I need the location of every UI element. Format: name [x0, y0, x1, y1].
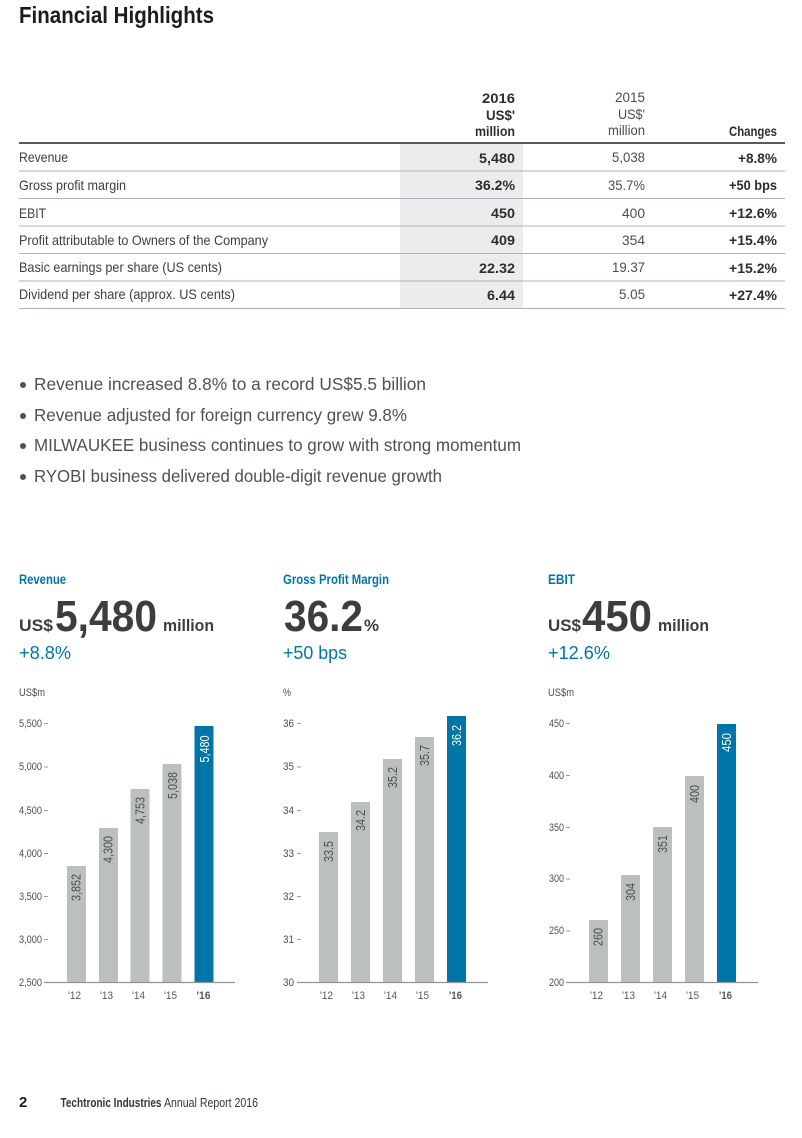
row: revenue: 5,038 [612, 149, 645, 165]
bar chart: gross profit margin [283, 716, 488, 1002]
bar chart: gross profit margin: 35.7 [418, 745, 432, 766]
change: gross profit margin: +50 bps [283, 642, 347, 663]
row: EBIT: 400 [622, 205, 645, 221]
row: gross profit margin [19, 177, 777, 193]
row: basic earnings per share: +15.2% [729, 260, 778, 276]
row: basic earnings per share [19, 259, 778, 276]
headline figure: EBIT [548, 592, 709, 641]
row: gross profit margin: +50 bps [729, 177, 777, 193]
bar chart: EBIT: 400 [549, 770, 564, 782]
bar chart: EBIT: 304 [624, 883, 638, 901]
report name: Techtronic Industries [60, 1096, 162, 1110]
row: gross profit margin: 36.2% [475, 177, 516, 193]
bar chart: gross profit margin: 30 [283, 977, 294, 989]
bar chart: revenue: 3,000 [19, 934, 42, 946]
bar chart: EBIT: '12 [590, 990, 603, 1002]
bar chart: revenue: 4,753 [134, 797, 148, 824]
bar chart: revenue: 2,500 [19, 977, 42, 989]
bar chart: EBIT: 450 [720, 733, 734, 752]
bar chart: EBIT: 400 [688, 785, 702, 803]
bar chart: EBIT: 300 [549, 873, 564, 885]
headline figure: EBIT: 450 [582, 592, 652, 641]
bullet list: MILWAUKEE business continues to grow with strong momentum [34, 435, 521, 455]
bar chart: revenue: '16 [196, 990, 210, 1002]
row: EBIT [19, 205, 778, 221]
panel: financial table [19, 89, 785, 308]
bar chart: revenue: 3,500 [19, 891, 42, 903]
headline figure: gross profit margin: 36.2 [284, 592, 363, 641]
heading: revenue: Revenue [19, 572, 66, 587]
bar chart: EBIT: 450 [549, 718, 564, 730]
page number: 2 [19, 1094, 27, 1111]
headline figure: revenue: 5,480 [55, 592, 157, 641]
title: Financial Highlights [19, 2, 214, 28]
headline figure: EBIT: million [658, 616, 709, 635]
row: basic earnings per share: Basic earnings per share (US cents) [19, 259, 222, 275]
bar chart: revenue: '14 [132, 990, 145, 1002]
bar chart: EBIT: '14 [654, 990, 667, 1002]
bullet list [20, 374, 521, 486]
bar chart: revenue: 5,480 [198, 735, 212, 762]
bar chart: revenue [19, 718, 235, 1002]
table header: US$' [618, 106, 645, 122]
table header: Changes [729, 123, 777, 139]
footer [19, 1094, 258, 1111]
panel: EBIT [548, 572, 758, 1002]
bar chart: gross profit margin: 35 [283, 761, 294, 773]
row: EBIT: +12.6% [729, 205, 778, 221]
row: revenue: Revenue [19, 149, 68, 165]
row: basic earnings per share: 19.37 [612, 259, 645, 275]
change: EBIT: +12.6% [548, 642, 610, 663]
bar chart: gross profit margin: 31 [283, 934, 294, 946]
table header [475, 89, 777, 139]
row: gross profit margin: Gross profit margin [19, 177, 126, 193]
row: profit attributable: 354 [622, 232, 645, 248]
row: EBIT: 450 [491, 205, 515, 221]
panel: revenue [19, 572, 235, 1002]
bar chart: revenue: '13 [100, 990, 113, 1002]
bar chart: gross profit margin: '15 [416, 990, 429, 1002]
row: dividend per share [19, 286, 778, 303]
row: basic earnings per share: 22.32 [479, 260, 515, 276]
bar chart: gross profit margin: 34.2 [354, 810, 368, 831]
headline figure: revenue [19, 592, 214, 641]
bar chart: EBIT: 351 [656, 835, 670, 853]
bar chart: gross profit margin: '12 [320, 990, 333, 1002]
table header: million [475, 123, 515, 139]
change: revenue: +8.8% [19, 642, 71, 663]
table header: 2016 [482, 90, 515, 106]
bar chart: gross profit margin: 33.5 [322, 841, 336, 862]
row: gross profit margin: 35.7% [608, 177, 645, 193]
row: revenue: +8.8% [738, 150, 778, 166]
row: profit attributable: Profit attributable to Owners of the Company [19, 232, 268, 248]
row: dividend per share: Dividend per share (approx. US cents) [19, 286, 235, 302]
highlighted 2016 column [400, 144, 523, 308]
headline figure: EBIT: US$ [548, 616, 582, 635]
bar chart: gross profit margin: 36 [283, 718, 294, 730]
row: dividend per share: 5.05 [619, 286, 645, 302]
bar chart: EBIT: 250 [549, 925, 564, 937]
bar chart: gross profit margin: '16 [449, 990, 462, 1002]
bar chart: gross profit margin: 34 [283, 805, 294, 817]
heading: EBIT: EBIT [548, 572, 576, 587]
bar chart: gross profit margin: 33 [283, 848, 294, 860]
report year: Annual Report 2016 [164, 1096, 258, 1110]
bullet list: RYOBI business delivered double-digit revenue growth [34, 466, 442, 486]
bullet list: Revenue increased 8.8% to a record US$5.5 billion [34, 374, 426, 394]
bar chart: EBIT: '13 [622, 990, 635, 1002]
bar chart: revenue: '15 [164, 990, 177, 1002]
row: EBIT: EBIT [19, 205, 46, 221]
heading: gross profit margin: Gross Profit Margin [283, 572, 389, 587]
headline figure: revenue: million [163, 616, 214, 635]
bar chart: EBIT: '16 [719, 990, 732, 1002]
row: profit attributable: 409 [491, 232, 515, 248]
row: dividend per share: 6.44 [487, 287, 515, 303]
table header: million [608, 122, 645, 138]
row: revenue [19, 149, 778, 166]
bar chart: EBIT: '15 [686, 990, 699, 1002]
bar chart: revenue: 5,038 [166, 772, 180, 799]
row: profit attributable [19, 232, 778, 248]
bar chart: revenue: 4,000 [19, 848, 42, 860]
bar chart: gross profit margin: '13 [352, 990, 365, 1002]
headline figure: gross profit margin: % [364, 616, 379, 635]
unit label: US$m [548, 687, 574, 699]
unit label: % [283, 687, 291, 699]
bar chart: revenue: 4,300 [102, 836, 116, 863]
table header: US$' [486, 107, 515, 123]
bar chart: gross profit margin: 36.2 [450, 725, 464, 746]
table header: 2015 [615, 89, 645, 105]
bar chart: EBIT [549, 718, 758, 1002]
row: dividend per share: +27.4% [729, 287, 778, 303]
unit label: US$m [19, 687, 45, 699]
headline figure: revenue: US$ [19, 616, 54, 635]
row: profit attributable: +15.4% [729, 232, 778, 248]
bar chart: revenue: 3,852 [70, 874, 84, 901]
bar chart: revenue: 5,500 [19, 718, 42, 730]
bar chart: revenue: 4,500 [19, 805, 42, 817]
bar chart: EBIT: 350 [549, 822, 564, 834]
panel: gross profit margin [283, 572, 488, 1002]
bar chart: EBIT: 260 [592, 928, 606, 946]
bar chart: gross profit margin: 32 [283, 891, 294, 903]
bar chart: gross profit margin: '14 [384, 990, 397, 1002]
bar chart: EBIT: 200 [549, 977, 564, 989]
bar chart: gross profit margin: 35.2 [386, 767, 400, 788]
row: revenue: 5,480 [479, 150, 515, 166]
bar chart: revenue: '12 [68, 990, 81, 1002]
bullet list: Revenue adjusted for foreign currency grew 9.8% [34, 405, 407, 425]
bar chart: revenue: 5,000 [19, 761, 42, 773]
